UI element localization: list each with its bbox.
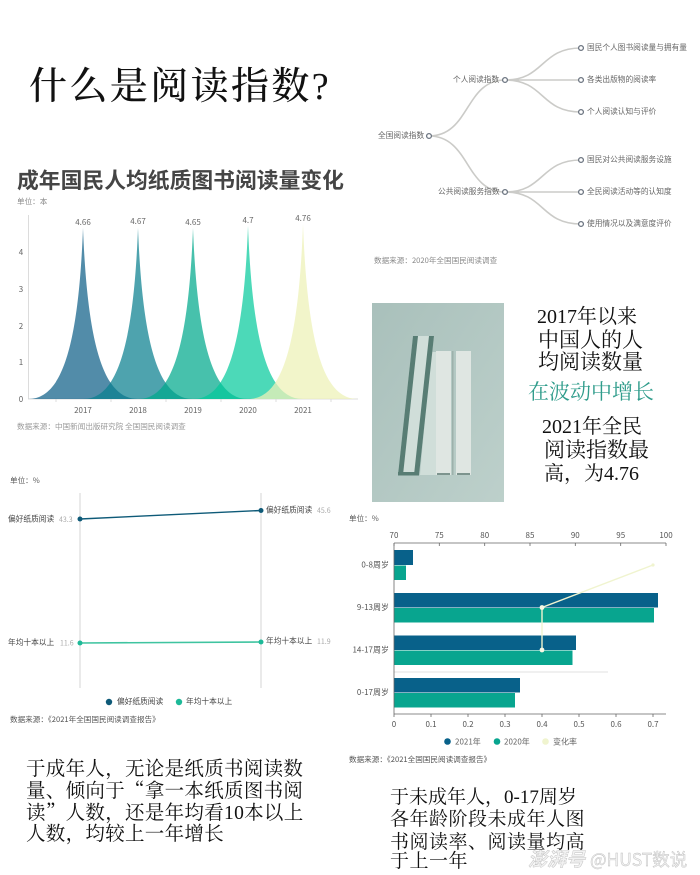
- top axis: 100: [659, 530, 673, 541]
- mind map source: 数据来源：2020年全国国民阅读调查: [374, 255, 498, 266]
- watermark: [528, 845, 687, 872]
- text block: minors summary: 书阅读率、阅读量均高: [390, 831, 585, 853]
- bottom and left axes: 0.3: [499, 719, 511, 730]
- y axis labels: [19, 247, 24, 405]
- mind map labels: 公共阅读服务指数: [438, 186, 500, 197]
- y axis labels: 2: [19, 321, 24, 332]
- bottom and left axes: [392, 543, 666, 730]
- value labels: 4.66: [75, 217, 91, 228]
- value labels: [75, 213, 311, 228]
- y axis labels: 4: [19, 247, 24, 258]
- bottom and left axes: 0.5: [573, 719, 585, 730]
- text block: trend summary: 均阅读数量: [538, 350, 643, 374]
- bar legend: 2021年: [455, 736, 481, 748]
- vertical guides: [80, 493, 261, 688]
- top axis: 90: [571, 530, 580, 541]
- age labels: 0-8周岁: [361, 560, 389, 571]
- bottom and left axes: 0.7: [647, 719, 659, 730]
- text block: adults summary: 量、倾向于“拿一本纸质图书阅: [26, 775, 303, 803]
- bar legend: 变化率: [553, 736, 577, 748]
- separator: [394, 671, 608, 673]
- text block: adults summary: [26, 758, 304, 845]
- value labels: 4.65: [185, 217, 201, 228]
- value labels: 4.67: [130, 216, 146, 227]
- panel: reading index mind map: [374, 42, 687, 266]
- panel: minor reading bar chart: [349, 513, 673, 765]
- chart source: 数据来源：中国新闻出版研究院 全国国民阅读调查: [17, 421, 186, 432]
- bottom and left axes: 0: [392, 719, 397, 730]
- ten books per year line: [78, 640, 264, 646]
- text block: adults summary: 人数，均较上一年增长: [26, 823, 224, 845]
- top axis: 75: [435, 530, 444, 541]
- y axis labels: 0: [19, 394, 24, 405]
- slope labels: 年均十本以上: [266, 636, 312, 647]
- bars 2021: [394, 550, 658, 692]
- bottom and left axes: 0.1: [425, 719, 437, 730]
- mind map labels: 个人阅读指数: [453, 74, 499, 85]
- unit label: 单位：本: [17, 196, 48, 207]
- mind map labels: 使用情况以及满意度评价: [587, 218, 672, 229]
- bottom and left axes: 0.4: [536, 719, 548, 730]
- text block: trend summary: 2021年全民: [542, 415, 642, 438]
- text block: minors summary: 于未成年人，0-17周岁: [390, 786, 577, 808]
- chart axes: [28, 215, 358, 402]
- y axis labels: 3: [19, 284, 23, 295]
- text block: trend summary: 高，为4.76: [544, 462, 639, 485]
- chart heading: 成年国民人均纸质图书阅读量变化: [17, 164, 344, 195]
- text block: minors summary: [390, 786, 585, 872]
- mind map nodes: [427, 46, 583, 226]
- unit label: 单位：%: [349, 513, 379, 524]
- bottom and left axes: 0.2: [462, 719, 474, 730]
- bars 2020: [394, 566, 654, 708]
- highlight phrase: 在波动中增长: [528, 380, 654, 404]
- value labels: 4.76: [295, 213, 311, 224]
- watermark: @HUST数说: [590, 847, 687, 872]
- age labels: 14-17周岁: [352, 645, 389, 656]
- top axis: 85: [526, 530, 534, 541]
- slope source: 数据来源：《2021年全国国民阅读调查报告》: [10, 714, 160, 725]
- year labels: 2018: [129, 405, 147, 416]
- text block: minors summary: 各年龄阶段未成年人图: [390, 808, 585, 830]
- slope labels: 43.3: [59, 515, 73, 525]
- mind map labels: 国民个人图书阅读量与拥有量: [587, 42, 687, 53]
- age labels: [352, 560, 389, 698]
- mind map labels: 全民阅读活动等的认知度: [587, 186, 672, 197]
- year labels: 2021: [294, 405, 312, 416]
- text block: adults summary: 于成年人，无论是纸质书阅读数: [26, 758, 303, 780]
- mind map labels: 个人阅读认知与评价: [587, 106, 657, 117]
- year labels: 2017: [74, 405, 92, 416]
- slope labels: 45.6: [317, 506, 331, 516]
- slope labels: 11.9: [317, 637, 331, 647]
- unit label: 单位：%: [10, 475, 40, 486]
- mind map labels: 各类出版物的阅读率: [587, 74, 657, 85]
- text block: minors summary: 于上一年: [390, 850, 468, 872]
- text block: trend summary: [528, 305, 654, 485]
- panel: adult slope chart: [8, 475, 331, 725]
- watermark: 澎湃号: [528, 845, 587, 872]
- bottom and left axes: 0.6: [610, 719, 622, 730]
- age labels: 9-13周岁: [357, 602, 389, 613]
- top axis: 80: [480, 530, 490, 541]
- slope legend: 年均十本以上: [186, 696, 232, 707]
- slope legend: [106, 696, 232, 707]
- text block: adults summary: 读”人数，还是年均看10本以上: [26, 797, 304, 825]
- value labels: 4.7: [242, 215, 254, 226]
- text block: trend summary: 中国人的人: [538, 328, 643, 352]
- year labels: [74, 405, 312, 416]
- text block: trend summary: 2017年以来: [537, 305, 637, 328]
- mind map connectors: [429, 48, 581, 224]
- slope labels: 偏好纸质阅读: [8, 514, 54, 525]
- age labels: 0-17周岁: [357, 687, 389, 698]
- photo: books: [372, 303, 504, 502]
- slope legend: 偏好纸质阅读: [117, 696, 163, 707]
- slope labels: 11.6: [60, 638, 74, 648]
- top axis: 70: [390, 530, 399, 541]
- spike areas by year: [28, 224, 358, 399]
- year labels: 2019: [184, 405, 202, 416]
- slope labels: 偏好纸质阅读: [266, 505, 312, 516]
- slope labels: 年均十本以上: [8, 637, 54, 648]
- mind map labels: 国民对公共阅读服务设施: [587, 154, 672, 165]
- bar legend: 2020年: [504, 736, 530, 748]
- year labels: 2020: [239, 405, 257, 416]
- title: 什么是阅读指数?: [29, 66, 331, 108]
- slope labels: [8, 505, 331, 648]
- top axis: 95: [616, 530, 625, 541]
- y axis labels: 1: [19, 357, 23, 368]
- mind map labels: 全国阅读指数: [378, 130, 424, 141]
- mind map labels: [378, 42, 687, 229]
- bar legend: [444, 736, 577, 748]
- text block: trend summary: 阅读指数最: [544, 438, 649, 462]
- top axis: [390, 530, 673, 546]
- panel: per-capita paper book reading chart: [17, 164, 358, 432]
- bar source: 数据来源：《2021全国国民阅读调查报告》: [349, 754, 491, 765]
- change rate line: [540, 563, 655, 652]
- paper reading preference line: [78, 508, 264, 522]
